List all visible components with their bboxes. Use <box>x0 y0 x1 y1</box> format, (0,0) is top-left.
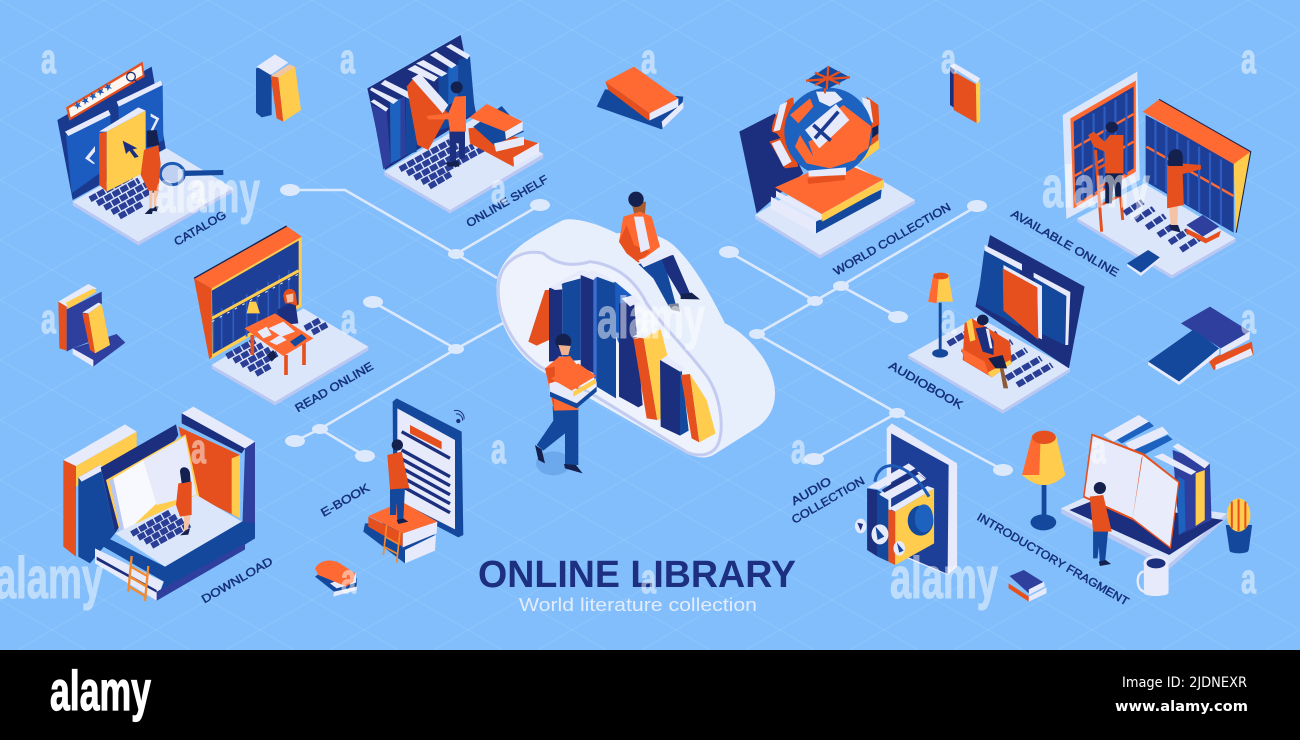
mug <box>1138 555 1169 596</box>
watermarks: a <box>191 165 206 212</box>
lamp <box>1022 431 1065 530</box>
audio books <box>867 463 934 565</box>
panel: introductory fragment <box>1009 415 1252 602</box>
person sitting on cloud <box>619 192 700 312</box>
ladder <box>128 556 148 601</box>
footer bar <box>0 650 1300 740</box>
laptop screen <box>975 235 1085 368</box>
label: download: DOWNLOAD <box>200 556 275 606</box>
left books <box>63 424 137 563</box>
watermarks: a <box>1241 35 1256 82</box>
watermarks: alamy <box>597 286 705 351</box>
tablet <box>1061 495 1227 569</box>
panel: available online <box>1063 72 1251 279</box>
play buttons <box>855 519 905 556</box>
connector lines: right lower network <box>757 334 1013 476</box>
book spines <box>370 44 475 169</box>
reading person <box>267 289 298 362</box>
man <box>387 439 409 524</box>
laptop base <box>908 317 1070 414</box>
pulled out book <box>407 73 448 150</box>
tablet <box>393 398 463 537</box>
laptop base <box>1077 183 1235 279</box>
back books <box>1103 415 1212 535</box>
panel: audiobook <box>908 235 1085 414</box>
subtitle: World literature collection <box>519 595 757 615</box>
keyboard <box>132 512 190 546</box>
keyboard <box>400 142 484 187</box>
book stack left <box>58 284 125 367</box>
labels <box>172 174 1130 608</box>
seated woman <box>975 315 1008 388</box>
yellow book with cursor <box>99 107 146 192</box>
cactus <box>1226 498 1252 553</box>
watermarks: a <box>791 425 806 472</box>
book top right of globe <box>950 63 980 123</box>
watermarks: alamy <box>155 160 260 225</box>
connector lines: left upper network <box>280 184 550 278</box>
panel: download <box>63 407 255 601</box>
ladder <box>383 525 400 563</box>
label: available online: AVAILABLE ONLINE <box>1009 208 1121 280</box>
website: www.alamy.com <box>1115 699 1248 715</box>
desk <box>244 313 313 375</box>
laptop screen <box>739 113 803 213</box>
panel: e-book <box>363 398 464 563</box>
person at shelf <box>427 81 466 167</box>
tablet <box>887 423 957 575</box>
keyboard <box>90 176 154 217</box>
label: audio collection: AUDIO <box>789 476 834 508</box>
watermarks: a <box>641 295 656 342</box>
panel: read online <box>194 226 368 405</box>
watermarks: a <box>491 165 506 212</box>
keyboard <box>948 324 1052 385</box>
label: e-book: E-BOOK <box>319 482 372 520</box>
title: ONLINE LIBRARY <box>478 554 796 596</box>
book on keyboard <box>1186 215 1221 243</box>
watermarks: a <box>941 295 956 342</box>
book pile right <box>1148 307 1254 385</box>
keyboard <box>227 320 327 374</box>
watermarks: a <box>641 35 656 82</box>
man <box>1090 482 1112 566</box>
connector lines: left lower network <box>285 296 505 462</box>
wifi icon <box>454 410 464 423</box>
laptop screen <box>367 35 476 170</box>
open book <box>1083 433 1179 549</box>
label: audio collection: COLLECTION <box>790 475 867 527</box>
right books <box>178 407 255 547</box>
small books <box>1009 570 1046 602</box>
watermarks: a <box>941 35 956 82</box>
label: read online: READ ONLINE <box>293 360 376 415</box>
stack of books <box>468 104 539 167</box>
label: world collection: WORLD COLLECTION <box>832 201 953 278</box>
book pile top centre <box>597 67 683 129</box>
rating card <box>66 62 145 121</box>
laptop base <box>73 148 233 245</box>
watermarks: alamy <box>1042 155 1150 220</box>
small book pile bottom left <box>315 561 357 597</box>
panel: central cloud with books and people <box>497 192 775 475</box>
watermarks: a <box>1241 555 1256 602</box>
armchair <box>961 318 1012 377</box>
books under globe <box>771 160 884 234</box>
watermarks: a <box>41 35 56 82</box>
globe <box>769 88 879 184</box>
watermarks: a <box>491 425 506 472</box>
lamp <box>247 302 260 313</box>
screen books <box>977 245 1070 345</box>
cloud books <box>528 270 716 442</box>
rating card: ★★★★★ <box>70 79 115 113</box>
laptop base <box>115 495 242 567</box>
label: introductory fragment: INTRODUCTORY FRAGMENT <box>975 511 1130 608</box>
label: catalog: CATALOG <box>172 209 229 249</box>
watermarks: a <box>1241 295 1256 342</box>
watermarks: a <box>41 295 56 342</box>
watermarks: a <box>191 425 206 472</box>
panel: catalog <box>57 62 233 245</box>
ladder <box>1095 140 1123 232</box>
laptop screen <box>57 67 166 200</box>
woman <box>176 467 192 535</box>
uk flag <box>806 66 850 93</box>
blue deck <box>95 522 255 601</box>
stacked books <box>363 502 437 563</box>
magnifier <box>160 163 223 185</box>
watermarks <box>0 35 1256 611</box>
watermarks: a <box>340 35 355 82</box>
shadow under standing person <box>536 451 571 475</box>
woman at shelf <box>1167 149 1201 233</box>
watermarks: a <box>1091 425 1106 472</box>
left screen with shelves <box>1063 72 1140 219</box>
laptop base <box>212 308 368 405</box>
blue books on screen <box>65 81 163 193</box>
label: audiobook: AUDIOBOOK <box>887 360 965 412</box>
bookshelf screen <box>194 226 302 359</box>
right shelf screen <box>1143 99 1251 233</box>
person carrying books <box>535 334 597 473</box>
headphones <box>875 466 933 536</box>
image id: Image ID: 2JDNEXR <box>1122 675 1247 691</box>
cloud body <box>497 219 775 457</box>
open book screen <box>101 424 199 539</box>
panel: world collection <box>739 66 915 259</box>
woman <box>141 130 161 214</box>
watermarks: a <box>341 555 356 602</box>
laptop base <box>755 160 915 259</box>
man on ladder <box>1088 122 1123 203</box>
laptop base <box>384 115 543 213</box>
small book <box>1127 250 1160 276</box>
watermarks: a <box>641 555 656 602</box>
book stack top left <box>256 54 301 122</box>
keyboard <box>1125 202 1199 250</box>
watermarks: a <box>341 295 356 342</box>
footer logo: alamy <box>50 659 151 722</box>
panel: online shelf <box>367 35 543 213</box>
panel: audio collection <box>855 423 957 575</box>
lamp <box>928 273 953 358</box>
watermarks: alamy <box>890 546 998 611</box>
connector lines: right upper network <box>719 200 987 339</box>
label: online shelf: ONLINE SHELF <box>465 174 550 230</box>
cloud front opening <box>498 252 721 455</box>
